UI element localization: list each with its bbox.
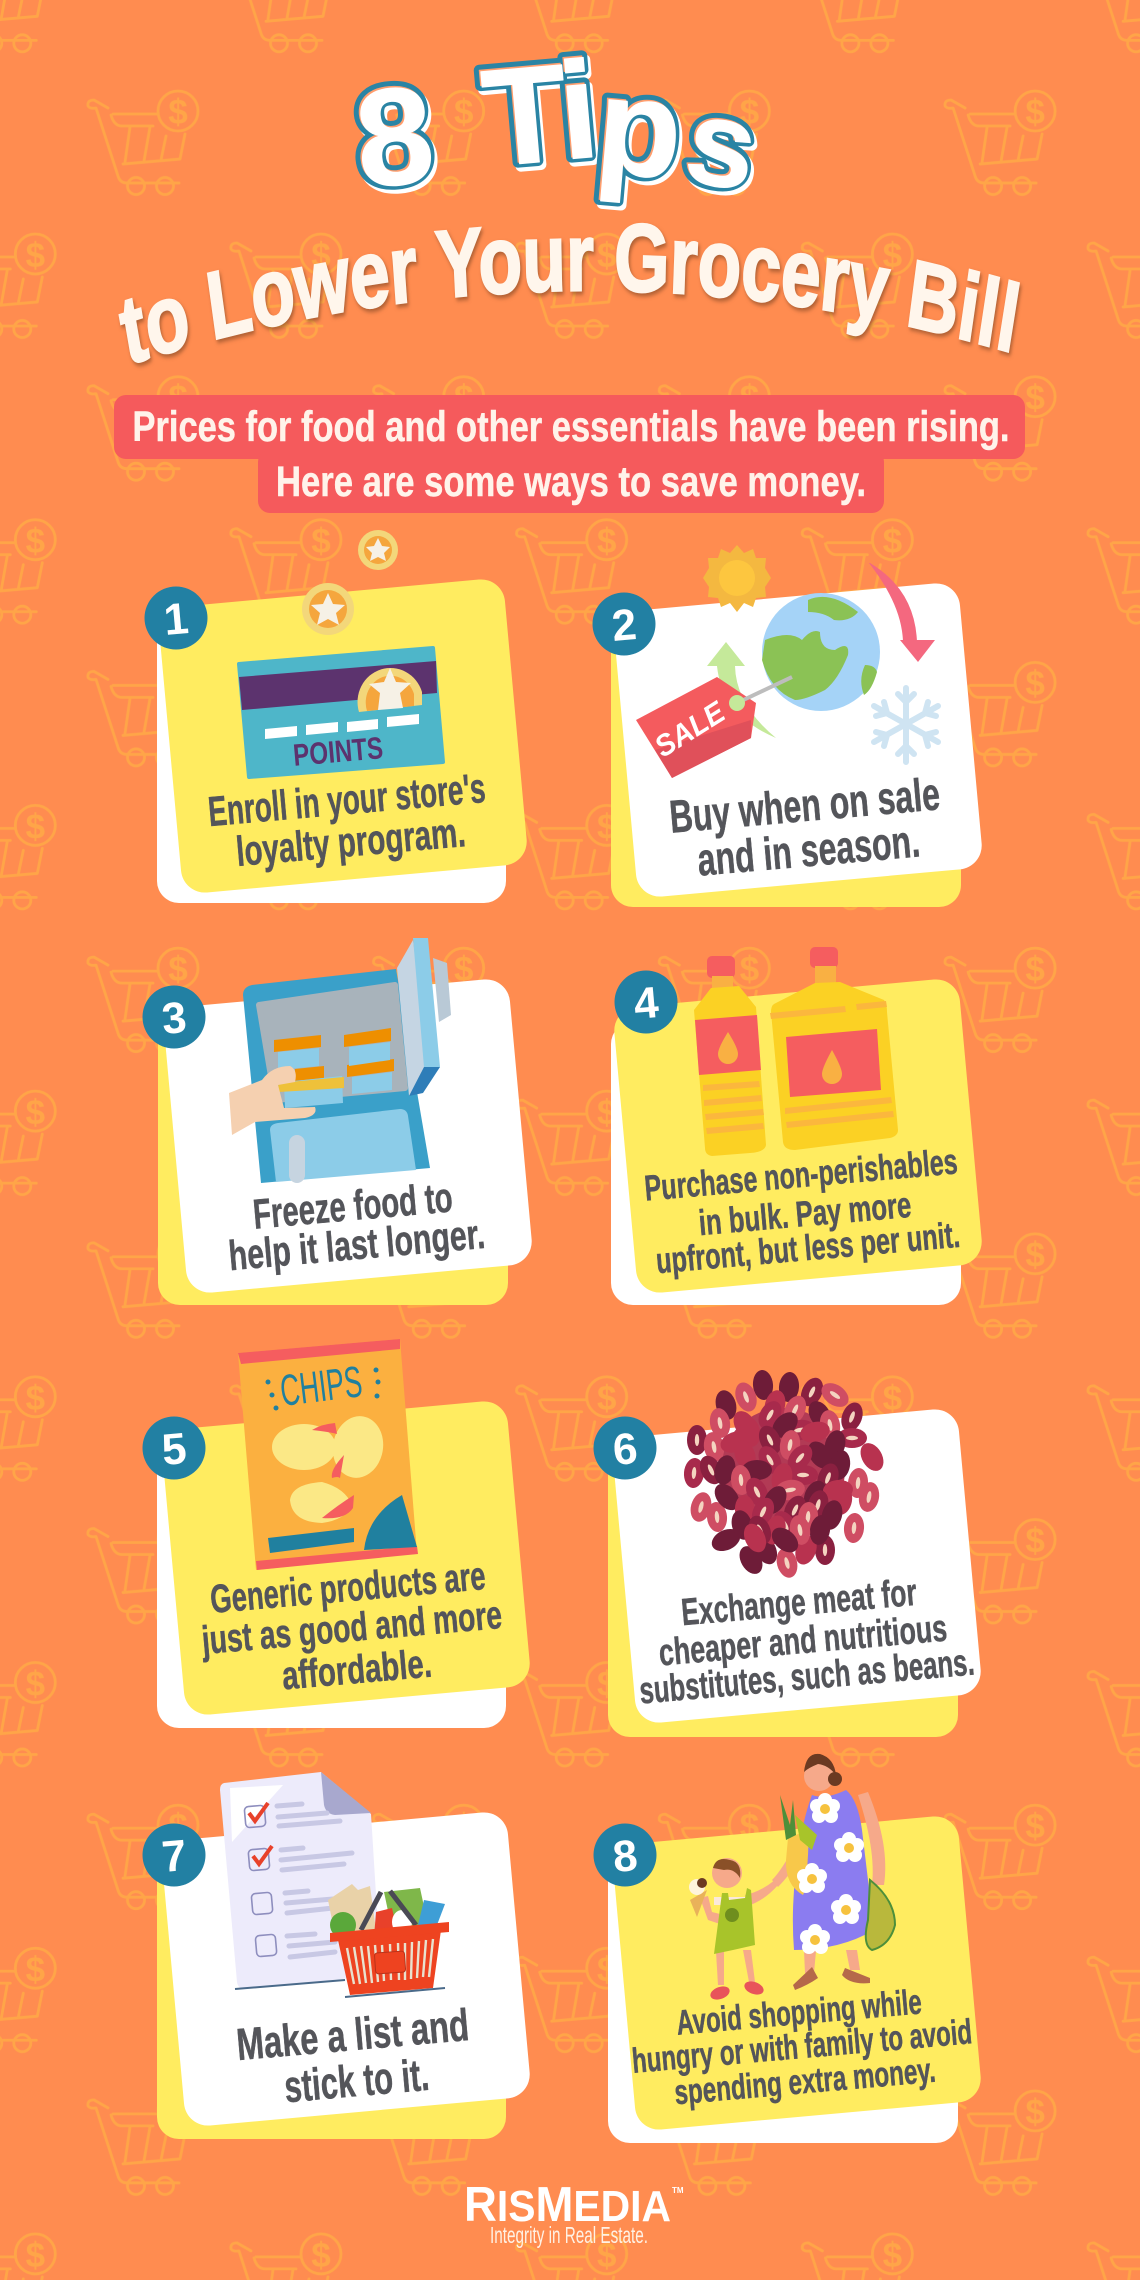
- number badge 2: [592, 592, 656, 656]
- icon: coins: [302, 530, 398, 635]
- tip 8 text: spending extra money.: [673, 2051, 937, 2112]
- number badge 5: [142, 1416, 206, 1480]
- number badge 6: 6: [611, 1424, 639, 1475]
- tip 5 text: affordable.: [280, 1642, 433, 1699]
- tip 3 text: [227, 1173, 487, 1279]
- number badge 4: [614, 970, 678, 1034]
- panel: tip 2: [592, 545, 984, 907]
- logo: RISMedia: TM: [672, 2186, 684, 2195]
- title: 8 Tips: [348, 31, 769, 220]
- tip 6 text: substitutes, such as beans.: [638, 1641, 976, 1713]
- panel: tip 8: [594, 1754, 983, 2143]
- panel: tip 5: [142, 1339, 532, 1728]
- tip 1 text: loyalty program.: [234, 808, 467, 875]
- tip 8 text: hungry or with family to avoid: [630, 2012, 974, 2081]
- tagline: Integrity in Real Estate.: [490, 2222, 648, 2248]
- tip 8 text: [630, 1982, 974, 2112]
- tip 3 text: help it last longer.: [227, 1210, 487, 1279]
- icon: checklist: [220, 1772, 381, 1989]
- number badge 1: 1: [162, 594, 190, 645]
- panel: tip 4: [611, 947, 984, 1305]
- panel: tip 7: [142, 1772, 532, 2139]
- tip 4 text: [643, 1140, 962, 1281]
- panel: tip 6: [594, 1369, 983, 1737]
- icon: small oil bottle: [694, 956, 766, 1156]
- tip 2 text: [667, 767, 942, 886]
- number badge 3: [142, 986, 206, 1048]
- number badge 7: 7: [160, 1831, 188, 1882]
- intro banner: Here are some ways to save money.: [276, 458, 866, 506]
- tip 5 text: just as good and more: [199, 1593, 504, 1663]
- icon: sun: [703, 545, 771, 612]
- intro banner: [114, 395, 1025, 513]
- number badge 3: 3: [160, 993, 188, 1044]
- tip 4 text: upfront, but less per unit.: [654, 1214, 962, 1281]
- icon: up arrow: [707, 642, 776, 738]
- icon: beans: [683, 1369, 888, 1580]
- icon: shopping basket: [328, 1884, 449, 1997]
- number badge 7: [142, 1824, 206, 1886]
- icon: mother and child: [689, 1754, 895, 2002]
- icon: snowflake: [874, 688, 938, 762]
- icon: sale tag: SALE: [649, 695, 732, 764]
- tip 7 text: [234, 1999, 471, 2112]
- icon: globe: [762, 593, 880, 711]
- number badge 8: 8: [611, 1831, 639, 1882]
- icon: chips bag: CHIPS: [278, 1357, 365, 1416]
- tip 6 text: [638, 1572, 976, 1713]
- panel: tip 1: [144, 530, 529, 903]
- number badge 2: 2: [610, 600, 638, 651]
- tip 4 text: in bulk. Pay more: [697, 1184, 913, 1243]
- icon: large oil bottle: [770, 947, 898, 1150]
- number badge 4: 4: [632, 978, 661, 1029]
- tip 1 text: Enroll in your store's: [206, 764, 487, 835]
- tip 8 text: Avoid shopping while: [675, 1982, 923, 2043]
- tip 7 text: Make a list and: [234, 1999, 471, 2070]
- tip 4 text: Purchase non-perishables: [643, 1140, 959, 1209]
- logo: RISMedia: RISMEDIA: [464, 2178, 671, 2232]
- number badge 1: [144, 586, 208, 650]
- tip 1 text: [206, 764, 487, 875]
- number badge 6: [594, 1416, 656, 1480]
- icon: loyalty card: [239, 648, 443, 777]
- icon: chips bag: [238, 1339, 418, 1570]
- tip 6 text: Exchange meat for: [680, 1572, 918, 1634]
- tip 7 text: stick to it.: [282, 2049, 431, 2112]
- tip 2 text: and in season.: [695, 814, 922, 886]
- tip 5 text: [199, 1554, 504, 1699]
- number badge 8: [594, 1824, 656, 1886]
- tip 3 text: Freeze food to: [251, 1173, 454, 1238]
- tip 2 text: Buy when on sale: [667, 767, 942, 843]
- subtitle: to Lower Your Grocery Bill: to Lower Your Grocery Bill: [118, 222, 1023, 368]
- tip 5 text: Generic products are: [208, 1554, 487, 1622]
- panel: tip 3: [142, 938, 534, 1305]
- icon: freezer: [229, 938, 451, 1183]
- icon: sale tag: [636, 677, 792, 778]
- tip 6 text: cheaper and nutritious: [657, 1608, 949, 1675]
- icon: loyalty card: POINTS: [292, 730, 384, 773]
- icon: season arrow: [869, 563, 935, 662]
- number badge 5: 5: [160, 1424, 188, 1475]
